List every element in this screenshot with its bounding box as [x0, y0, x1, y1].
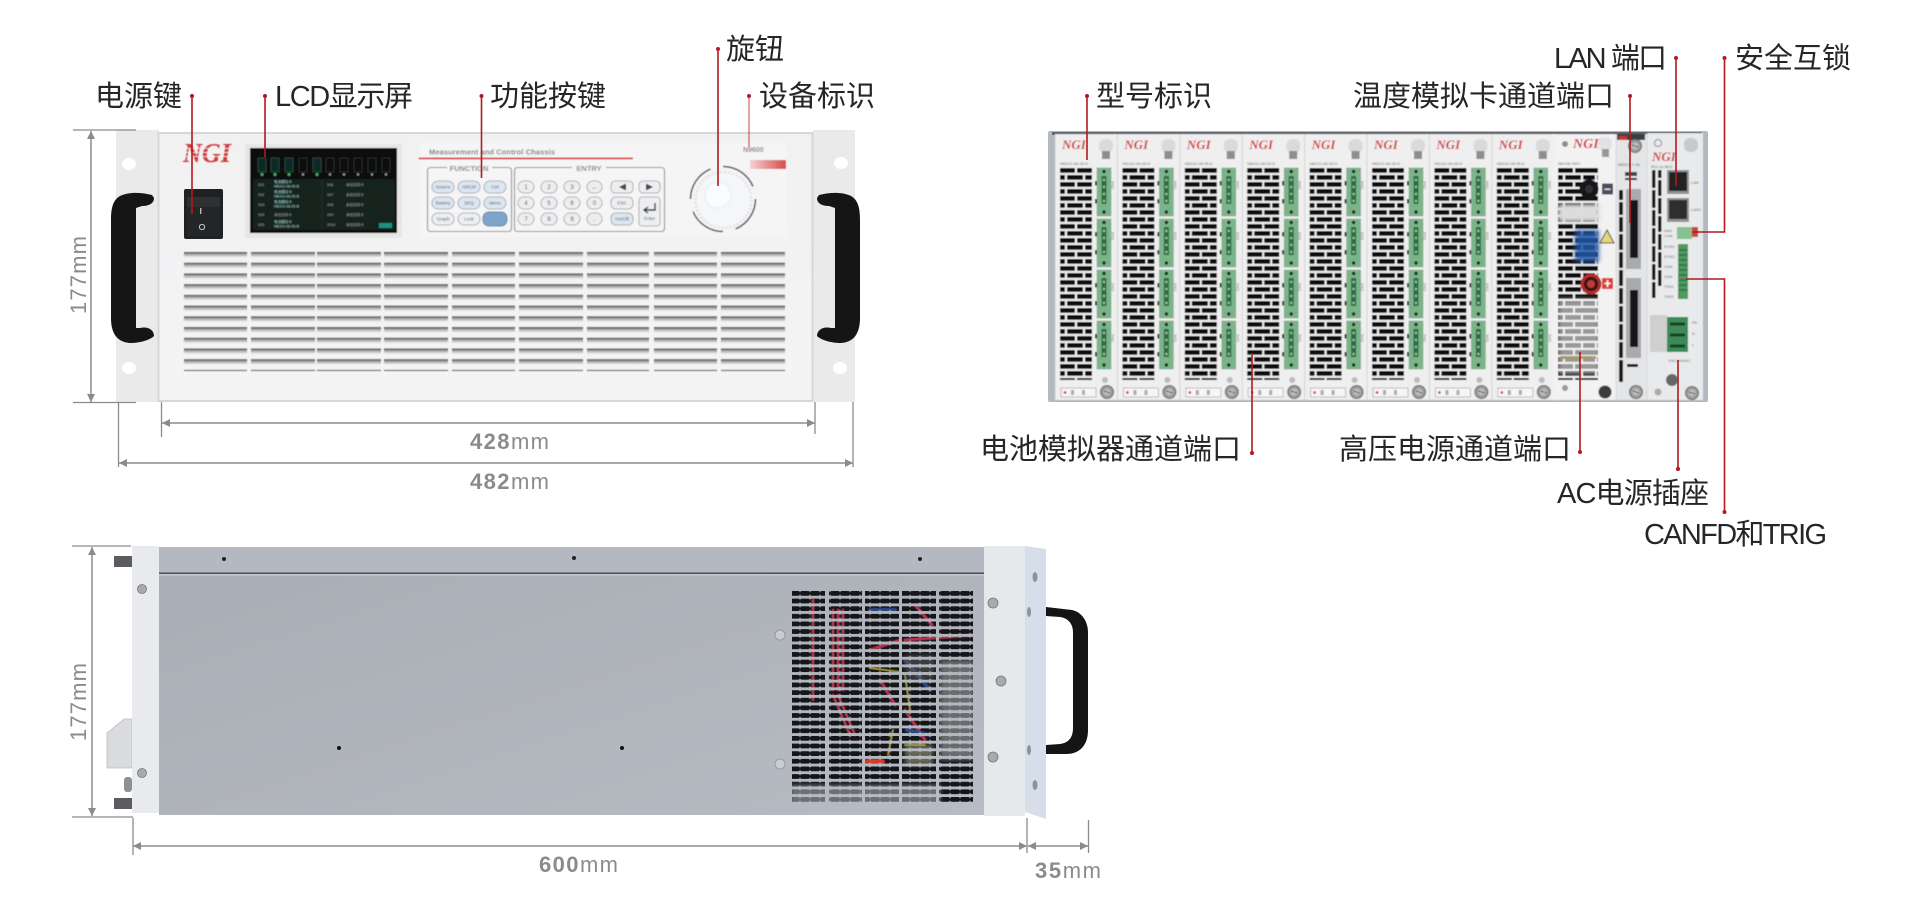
panel: side vent with internal wiring: [792, 591, 973, 802]
panel: entry keys: 6: [570, 201, 574, 207]
callout: function keys: [480, 80, 606, 178]
dimension: overall width 482mm: 482mm: [470, 469, 549, 494]
text: channel list: 电池模拟卡: [274, 219, 292, 224]
panel: battery simulator cards: CH2: [1422, 282, 1427, 291]
panel: battery simulator cards: CH4: [1297, 180, 1302, 189]
icon: LAN ports: LAN: [1691, 180, 1699, 185]
panel: function keys: Ctrl: [491, 185, 499, 190]
icon: rack mounting holes: [122, 157, 848, 374]
panel: entry keys: 8: [547, 217, 551, 223]
icon: CANFD and TRIG connector: SYNC: [1664, 254, 1675, 259]
callout: knob: [716, 33, 784, 186]
text: channel list: NB101-06-05-B: [274, 224, 300, 228]
panel: battery simulator cards: NB101-06-05-D: [1122, 161, 1151, 166]
panel: battery simulator cards: CH4: [1235, 180, 1240, 189]
panel: battery simulator cards: NGI: [1311, 137, 1336, 152]
panel: left flange: [132, 546, 159, 813]
callout: AC socket: AC电源插座: [1557, 477, 1709, 510]
panel: battery simulator cards: CH3: [1172, 231, 1177, 240]
callout: LCD display: [263, 81, 413, 157]
text: channel list: 电池模拟卡: [274, 189, 292, 194]
front view: chassis: [111, 130, 860, 402]
callout: battery simulator port: [980, 353, 1254, 466]
icon: AC power socket: 100-240VAC: [1668, 358, 1691, 363]
callout: temperature simulator port: 温度模拟卡通道端口: [1353, 80, 1614, 113]
panel: battery simulator cards: CH1: [1484, 333, 1489, 342]
icon: CANFD and TRIG connector: CAN: [1664, 264, 1673, 269]
panel: battery simulator cards: NGI: [1186, 137, 1212, 152]
dimension: depth 600mm: 600mm: [539, 852, 618, 877]
callout: device identification: [747, 80, 875, 147]
text: channel list: NB101-06-05-B: [274, 194, 300, 198]
panel: high voltage power card: [1553, 134, 1616, 400]
panel: battery simulator cards: CH1: [1297, 333, 1302, 342]
text: channel list: NB101-06-05-B: [274, 204, 300, 208]
icon: right handle: [817, 193, 860, 343]
callout: battery simulator port: 电池模拟器通道端口: [980, 433, 1241, 466]
panel: side body: [159, 547, 984, 815]
panel: battery simulator cards: NGI: [1435, 137, 1461, 152]
panel: function keys: SEQ: [464, 201, 474, 206]
icon: side handle: [1046, 607, 1088, 754]
panel: battery simulator cards: CH3: [1297, 231, 1302, 240]
panel: function keys: Source: [436, 185, 451, 190]
icon: CANFD and TRIG connector: [1664, 244, 1688, 299]
icon: safety interlock connector: [1664, 227, 1698, 239]
dimension: front height 177mm: 177mm: [66, 236, 91, 314]
side view: chassis: [107, 546, 1088, 819]
icon: D-sub connector bottom: [1626, 278, 1641, 358]
panel: entry keys: 2: [547, 185, 551, 191]
callout: AC socket: [1557, 360, 1709, 510]
panel: battery simulator cards: CH4: [1422, 180, 1427, 189]
panel: battery simulator cards: NB101-06-05-D: [1434, 161, 1463, 166]
callout: CANFD and TRIG: CANFD和TRIG: [1644, 519, 1827, 551]
panel: battery simulator cards: CH2: [1297, 282, 1302, 291]
panel: battery simulator cards: NGI: [1123, 137, 1149, 152]
callout: LAN port: LAN 端口: [1554, 42, 1667, 75]
icon: CANFD and TRIG connector: SYNC: [1664, 244, 1675, 249]
text: channel list: 未检测到卡: [346, 192, 364, 197]
callout: power key: 电源键: [95, 80, 182, 113]
icon: rotary knob: [690, 166, 756, 232]
text: channel list: S03: [258, 203, 264, 207]
panel: battery simulator cards: NB101-06-05-D: [1185, 161, 1213, 166]
dimension: handle 35mm: [1028, 820, 1101, 883]
text: channel list: S04: [258, 213, 264, 217]
panel: battery simulator cards: NB101-06-05-D: [1247, 161, 1275, 166]
callout: safety interlock: 安全互锁: [1735, 42, 1851, 75]
text: channel list: 电池模拟卡: [274, 199, 292, 204]
icon: left side connectors: [107, 556, 132, 809]
panel: battery simulator cards: NB101-06-05-D: [1310, 161, 1338, 166]
text: channel list: 未检测到卡: [346, 202, 364, 207]
icon: power switch: [184, 189, 223, 239]
panel: control and AC card: [1647, 133, 1703, 400]
text: channel list: S08: [327, 203, 333, 207]
callout: safety interlock: [1692, 42, 1851, 232]
panel: temperature simulator card: [1616, 134, 1647, 400]
icon: CANFD and TRIG connector: TRIG: [1664, 294, 1674, 299]
panel: entry keys: ENTRY: [576, 164, 602, 173]
panel: battery simulator cards: CH3: [1422, 231, 1427, 240]
panel: entry keys: 0: [593, 201, 597, 207]
text: channel list: NB101-06-05-B: [274, 184, 300, 188]
text: channel list: S010: [327, 223, 335, 227]
icon: CANFD and TRIG connector: CAN: [1664, 274, 1673, 279]
panel: battery simulator cards: CH3: [1110, 231, 1115, 240]
callout: function keys: 功能按键: [490, 80, 606, 113]
icon: D-sub connector top: [1626, 189, 1641, 269]
panel: right flange: [984, 546, 1025, 816]
panel: entry keys: .: [594, 217, 596, 223]
panel: entry keys: 1: [524, 185, 528, 191]
panel: right front ear: [1025, 546, 1046, 819]
icon: safety interlock connector: Inter: [1664, 228, 1673, 233]
panel: high voltage power card: NB708 250Y: [1558, 161, 1581, 166]
icon: positive terminal: [1580, 274, 1613, 294]
callout: high voltage power port: 高压电源通道端口: [1339, 433, 1571, 466]
dimension: side height 177mm: 177mm: [66, 663, 91, 741]
text: model number: N9600: [743, 147, 764, 154]
panel: battery simulator cards: CH1: [1547, 333, 1552, 342]
panel: battery simulator cards: CH2: [1235, 282, 1240, 291]
panel: function keys: [428, 162, 512, 232]
panel: battery simulator cards: [1055, 134, 1554, 400]
panel: function keys: Alt/Ctrl: [462, 185, 476, 190]
panel: battery simulator cards: CH3: [1235, 231, 1240, 240]
panel: battery simulator cards: CH2: [1172, 282, 1177, 291]
text: device title: Measurement and Control Chassis: [429, 148, 555, 156]
callout: LAN port: [1554, 42, 1678, 186]
panel: battery simulator cards: CH2: [1110, 282, 1115, 291]
icon: left handle: [111, 193, 154, 343]
text: channel list: 未检测到卡: [274, 212, 292, 217]
panel: battery simulator cards: NB101-06-05-D: [1060, 161, 1088, 166]
panel: battery simulator cards: CH1: [1422, 333, 1427, 342]
panel: entry keys: 5: [547, 201, 551, 207]
icon: AC power socket: L: [1692, 342, 1695, 347]
panel: entry keys: 7: [524, 217, 528, 223]
panel: battery simulator cards: CH1: [1172, 333, 1177, 342]
callout: device identification: 设备标识: [759, 80, 875, 113]
callout: LCD display: LCD显示屏: [275, 81, 413, 113]
panel: battery simulator cards: CH3: [1547, 231, 1552, 240]
panel: battery simulator cards: CH2: [1484, 282, 1489, 291]
panel: high voltage power card: NGI: [1572, 137, 1599, 152]
panel: control and AC card: N11-xx-BD2: [1651, 164, 1673, 169]
panel: battery simulator cards: NGI: [1061, 137, 1087, 152]
panel: battery simulator cards: CH4: [1110, 180, 1115, 189]
callout: temperature simulator port: [1353, 80, 1632, 223]
panel: entry keys: ←: [592, 185, 598, 191]
icon: red dot gradient: [750, 160, 786, 169]
callout: model identification: 型号标识: [1096, 80, 1212, 113]
icon: negative terminal: [1580, 180, 1613, 198]
text: channel list: S06: [327, 183, 333, 187]
vent slots: [1652, 170, 1662, 298]
icon: warning triangle: [1600, 230, 1614, 243]
panel: function keys: Lock: [464, 217, 475, 222]
icon: safety interlock connector: Lock: [1664, 233, 1672, 238]
icon: LAN ports: [1667, 170, 1702, 222]
panel: entry keys: 4: [524, 201, 528, 207]
panel: front main plate: [158, 133, 812, 401]
panel: entry keys: Enter: [644, 216, 655, 221]
panel: battery simulator cards: NB101-06-05-D: [1372, 161, 1400, 166]
panel: rear chassis frame: [1048, 131, 1708, 402]
panel: battery simulator cards: CH2: [1547, 282, 1552, 291]
panel: battery simulator cards: NGI: [1248, 137, 1274, 152]
panel: function keys: FUNCTION: [450, 164, 488, 173]
rear view: chassis: [1048, 131, 1708, 402]
panel: entry keys: 9: [570, 217, 574, 223]
panel: front left rack ear: [116, 130, 159, 402]
text: channel list: 未检测到卡: [346, 222, 364, 227]
icon: AC power socket: N: [1692, 331, 1695, 336]
panel: front right rack ear: [813, 130, 855, 402]
panel: battery simulator cards: CH4: [1484, 180, 1489, 189]
dimension: front width 428mm: 428mm: [470, 429, 549, 454]
panel: entry keys: [514, 162, 664, 232]
decorative red rule: [419, 158, 633, 159]
callout: knob: 旋钮: [726, 33, 784, 66]
panel: control area: [419, 143, 787, 237]
callout: model identification: [1085, 80, 1212, 160]
callout: power key: [95, 80, 194, 214]
callout: high voltage power port: [1339, 352, 1582, 466]
text: channel list: S02: [258, 193, 264, 197]
panel: function keys: Battery: [436, 201, 451, 206]
text: channel list: S05: [258, 223, 264, 227]
panel: battery simulator cards: CH1: [1360, 333, 1365, 342]
panel: side top strip: [159, 547, 984, 573]
panel: battery simulator cards: CH3: [1360, 231, 1365, 240]
text: channel list: 电池模拟卡: [274, 179, 292, 184]
panel: entry keys: ESC: [617, 201, 627, 206]
panel: temperature simulator card: NB301-T-48: [1618, 162, 1640, 167]
panel: function keys: Graph: [437, 217, 450, 222]
icon: LAN ports: LAN2: [1691, 207, 1702, 212]
panel: battery simulator cards: NGI: [1373, 137, 1399, 152]
text: channel list: S01: [258, 183, 264, 187]
panel: function keys: Menu: [489, 201, 501, 206]
panel: battery simulator cards: CH4: [1547, 180, 1552, 189]
text: channel list: 未检测到卡: [346, 212, 364, 217]
text: channel list: S07: [327, 193, 333, 197]
icon: NGI logo: NGI: [182, 138, 232, 168]
text: channel list: 未检测到卡: [346, 182, 364, 187]
panel: control and AC card: NGI: [1651, 149, 1677, 164]
icon: AC power socket: PE: [1692, 320, 1698, 325]
panel: battery simulator cards: NGI: [1498, 137, 1524, 152]
callout: CANFD and TRIG: [1644, 279, 1827, 551]
panel: battery simulator cards: NB101-06-05-D: [1497, 161, 1525, 166]
panel: front vent grille: [184, 252, 785, 371]
panel: entry keys: On/Off: [615, 217, 629, 222]
panel: entry keys: 3: [570, 185, 574, 191]
panel: battery simulator cards: CH3: [1484, 231, 1489, 240]
panel: battery simulator cards: CH2: [1360, 282, 1365, 291]
icon: screw holes: [138, 556, 1038, 790]
panel: battery simulator cards: CH4: [1360, 180, 1365, 189]
panel: battery simulator cards: CH4: [1172, 180, 1177, 189]
text: channel list: [253, 179, 395, 230]
text: channel list: S09: [327, 213, 333, 217]
panel: battery simulator cards: CH1: [1235, 333, 1240, 342]
icon: AC power socket: [1667, 317, 1698, 363]
panel: battery simulator cards: CH1: [1110, 333, 1115, 342]
chart: channel slots: [258, 158, 390, 176]
dimension: handle 35mm: 35mm: [1035, 858, 1101, 883]
icon: CANFD and TRIG connector: TRIG: [1664, 284, 1674, 289]
LCD display: [245, 144, 402, 238]
